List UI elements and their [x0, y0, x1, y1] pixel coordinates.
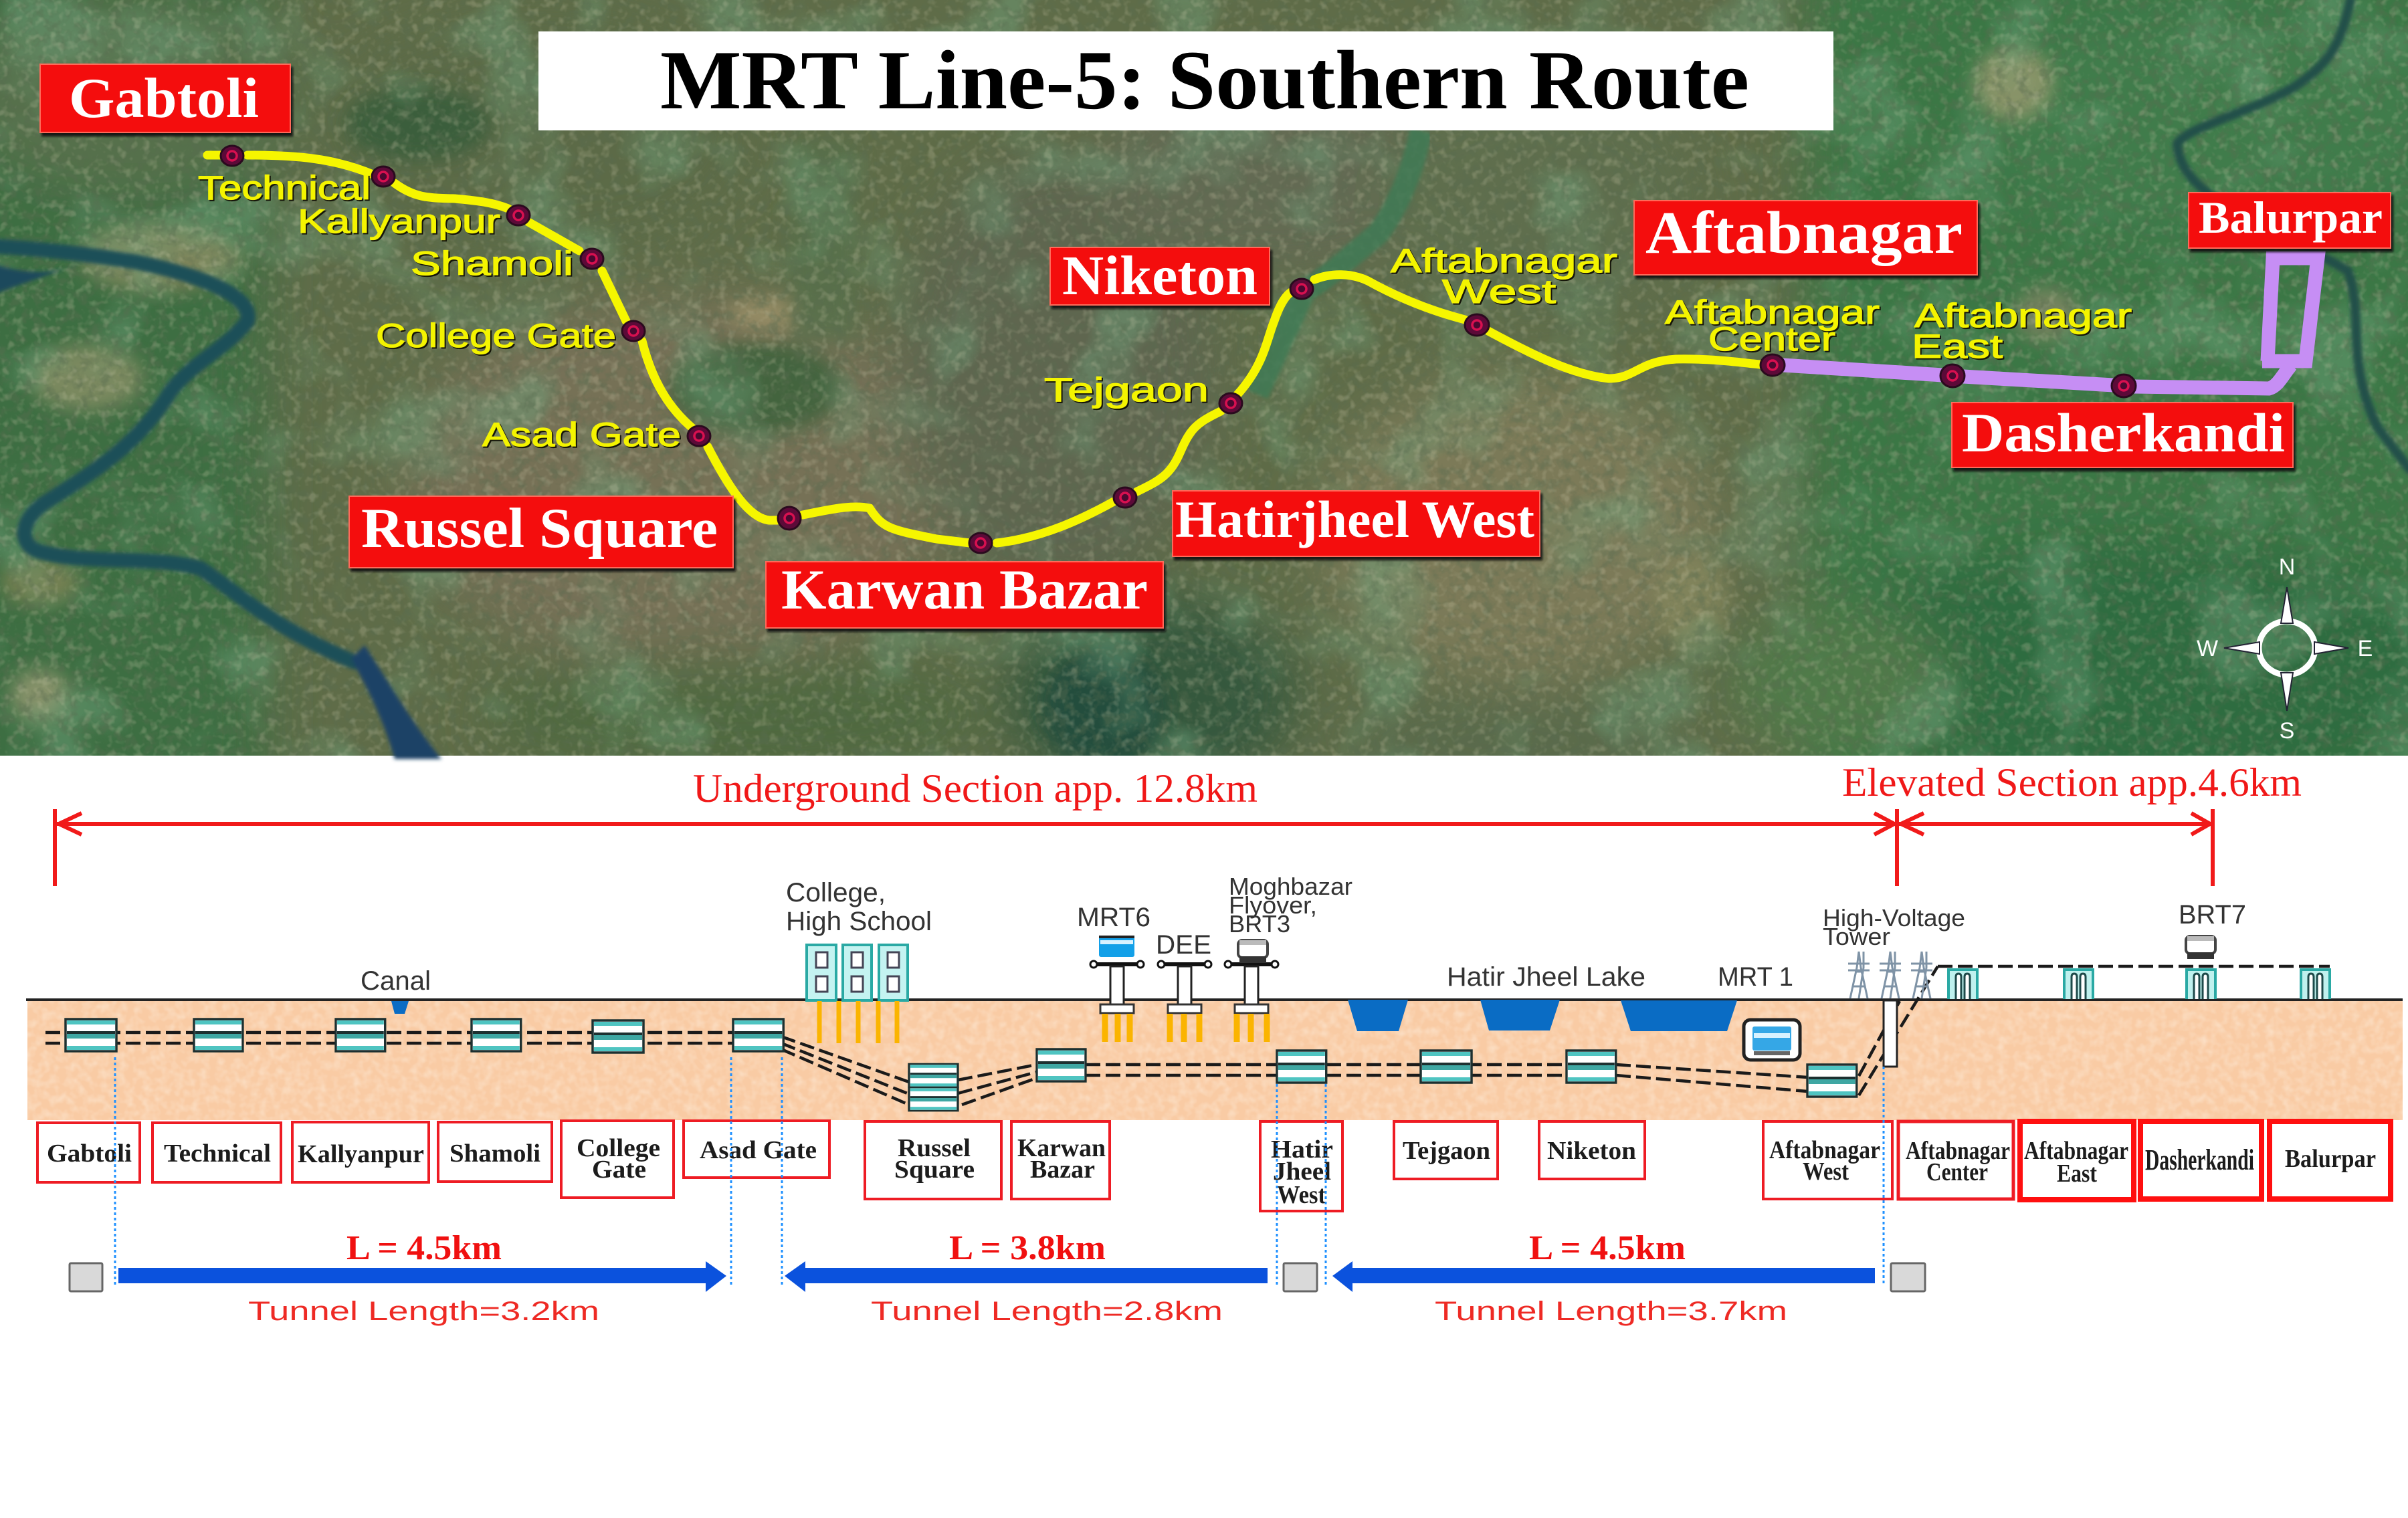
yellow station labels: Asad Gate	[482, 416, 681, 453]
box: Dasherkandi: Dasherkandi	[2145, 1144, 2254, 1176]
yellow station labels: Aftabnagar	[1391, 242, 1617, 280]
box: Tejgaon: Tejgaon	[1403, 1137, 1490, 1165]
red label: Balurpar: Balurpar	[2199, 192, 2383, 243]
box: Aftabnagar West: West	[1803, 1158, 1849, 1186]
buildings: college and high school: High School	[786, 907, 932, 936]
box: Gabtoli: Gabtoli	[47, 1140, 132, 1168]
box: Dasherkandi	[2140, 1121, 2262, 1199]
box: Aftabnagar Center: Aftabnagar	[1906, 1137, 2010, 1165]
box: Balurpar: Balurpar	[2285, 1145, 2376, 1173]
heading: underground section: Underground Section app. 12.8km	[693, 766, 1258, 810]
shaft box: end	[1891, 1263, 1925, 1291]
red section span arrows	[55, 809, 2213, 886]
station name boxes	[37, 1121, 2391, 1211]
box: Aftabnagar East	[2020, 1121, 2134, 1200]
length label 1: L = 4.5km	[346, 1229, 502, 1267]
arrow: tunnel section 1	[118, 1261, 726, 1292]
blue dotted alignment lines	[115, 1057, 1884, 1285]
box: College Gate	[561, 1121, 674, 1198]
red label: Niketon: Niketon	[1062, 245, 1258, 307]
icon: compass: E	[2358, 636, 2373, 661]
piers: DEE	[1156, 930, 1211, 1042]
box: Shamoli	[438, 1122, 552, 1182]
yellow station labels: Kallyanpur	[298, 203, 500, 240]
length label 2: L = 3.8km	[949, 1229, 1106, 1267]
icon: compass: S	[2280, 718, 2294, 744]
ground: sandy soil band	[26, 1000, 2403, 1120]
arrow: tunnel section 3	[1332, 1261, 1875, 1292]
box: Hatir Jheel West: West	[1277, 1181, 1326, 1209]
yellow station labels: College Gate	[376, 317, 616, 354]
piers: MRT6	[1077, 903, 1150, 1042]
underground stations	[66, 1019, 1857, 1111]
box: Russel Square: Square	[894, 1156, 975, 1184]
red label: Gabtoli: Gabtoli	[69, 67, 259, 130]
yellow station labels: Aftabnagar	[1914, 297, 2132, 334]
box: Aftabnagar Center	[1898, 1121, 2013, 1199]
box: Russel Square: Russel	[898, 1134, 971, 1162]
tunnel length 2: Tunnel Length=2.8km	[871, 1297, 1223, 1326]
red label: Russel Square: Russel Square	[361, 497, 718, 560]
high-voltage towers and shaft: High-Voltage	[1823, 904, 1965, 932]
BRT7 crossing	[2179, 900, 2246, 959]
panel: satellite map	[0, 0, 2408, 836]
canal: central channel	[1258, 130, 1421, 395]
heading: elevated section: Elevated Section app.4.6km	[1842, 760, 2302, 804]
arrow: tunnel section 2	[785, 1261, 1268, 1292]
box: Balurpar	[2270, 1121, 2391, 1199]
red label: Aftabnagar: Aftabnagar	[1645, 200, 1963, 266]
route: yellow underground line	[207, 155, 1761, 543]
box: Aftabnagar East: Aftabnagar	[2024, 1137, 2128, 1165]
box: Asad Gate: Asad Gate	[700, 1136, 817, 1164]
red label: Hatirjheel West: Hatirjheel West	[1175, 490, 1534, 548]
box: Niketon: Niketon	[1547, 1137, 1636, 1165]
satellite imagery background	[0, 0, 2408, 836]
title: MRT Line-5: Southern Route	[660, 34, 1749, 127]
canal	[361, 966, 431, 1014]
box: College Gate: Gate	[592, 1156, 646, 1184]
box: College Gate: College	[577, 1134, 660, 1162]
route: purple elevated line	[1783, 258, 2318, 389]
shaft box: start	[70, 1263, 102, 1291]
river: east	[2177, 0, 2408, 471]
box: Kallyanpur	[292, 1122, 429, 1182]
tunnel length 1: Tunnel Length=3.2km	[248, 1297, 599, 1326]
box: Technical: Technical	[164, 1140, 271, 1168]
icon: compass: W	[2197, 636, 2218, 661]
box: Karwan Bazar: Bazar	[1030, 1156, 1095, 1184]
piers: DEE: DEE	[1156, 930, 1211, 960]
shaft box: middle	[1284, 1263, 1317, 1291]
river: west	[0, 246, 441, 759]
yellow station labels: West	[1442, 273, 1556, 310]
elevated stations	[1948, 970, 2330, 999]
box: Karwan Bazar: Karwan	[1017, 1134, 1106, 1162]
high-voltage towers and shaft: Tower	[1823, 923, 1890, 950]
piers: Moghbazar flyover BRT3	[1225, 873, 1352, 1042]
route station markers	[221, 146, 2136, 553]
box: Technical	[153, 1123, 281, 1182]
piers: Moghbazar flyover BRT3: Flyover,	[1229, 891, 1317, 919]
box: Tejgaon	[1394, 1121, 1498, 1179]
yellow station labels: Aftabnagar	[1665, 294, 1880, 331]
box: Aftabnagar Center: Center	[1926, 1158, 1988, 1186]
box: Asad Gate	[684, 1121, 829, 1178]
piers: Moghbazar flyover BRT3: BRT3	[1229, 910, 1290, 938]
yellow station labels: Tejgaon	[1044, 371, 1209, 409]
box: Hatir Jheel West	[1260, 1121, 1342, 1211]
box: Aftabnagar West: Aftabnagar	[1769, 1136, 1880, 1164]
lakes: Hatir Jheel: Hatir Jheel Lake	[1447, 962, 1645, 992]
box: Karwan Bazar	[1011, 1121, 1110, 1199]
box: Niketon	[1539, 1121, 1645, 1179]
buildings: college and high school	[786, 878, 932, 1043]
BRT7 crossing: BRT7	[2179, 900, 2246, 930]
length label 3: L = 4.5km	[1529, 1229, 1686, 1267]
yellow station labels: Technical	[198, 169, 371, 207]
box: Russel Square	[865, 1121, 1001, 1199]
buildings: college and high school: College,	[786, 878, 886, 907]
underground tracks	[45, 966, 2330, 1105]
box: Gabtoli	[37, 1123, 140, 1182]
high-voltage towers and shaft	[1823, 904, 1965, 1067]
yellow station labels: Shamoli	[411, 245, 573, 282]
yellow station labels	[198, 169, 2132, 453]
icon: compass	[2197, 554, 2373, 744]
box: Kallyanpur: Kallyanpur	[298, 1140, 424, 1168]
tunnel length 3: Tunnel Length=3.7km	[1435, 1297, 1787, 1326]
piers: Moghbazar flyover BRT3: Moghbazar	[1229, 873, 1352, 900]
yellow station labels: East	[1912, 328, 2003, 365]
lakes: Hatir Jheel	[1348, 962, 1737, 1031]
yellow station labels: Center	[1708, 320, 1835, 358]
icon: MRT1 crossing	[1718, 962, 1800, 1060]
box: Hatir Jheel West: Hatir	[1271, 1135, 1333, 1164]
box: Aftabnagar East: East	[2057, 1160, 2097, 1188]
box: Aftabnagar West	[1763, 1121, 1892, 1199]
red label: Karwan Bazar: Karwan Bazar	[781, 558, 1148, 621]
piers: MRT6: MRT6	[1077, 903, 1150, 932]
icon: MRT1 crossing: MRT 1	[1718, 962, 1793, 992]
red label: Dasherkandi: Dasherkandi	[1962, 402, 2285, 463]
canal: Canal	[361, 966, 431, 996]
red label: Gabtoli	[40, 64, 290, 132]
box: Shamoli: Shamoli	[449, 1140, 540, 1168]
panel: longitudinal section diagram	[26, 760, 2403, 1326]
icon: compass: N	[2279, 554, 2295, 580]
box: Hatir Jheel West: Jheel	[1273, 1158, 1331, 1186]
